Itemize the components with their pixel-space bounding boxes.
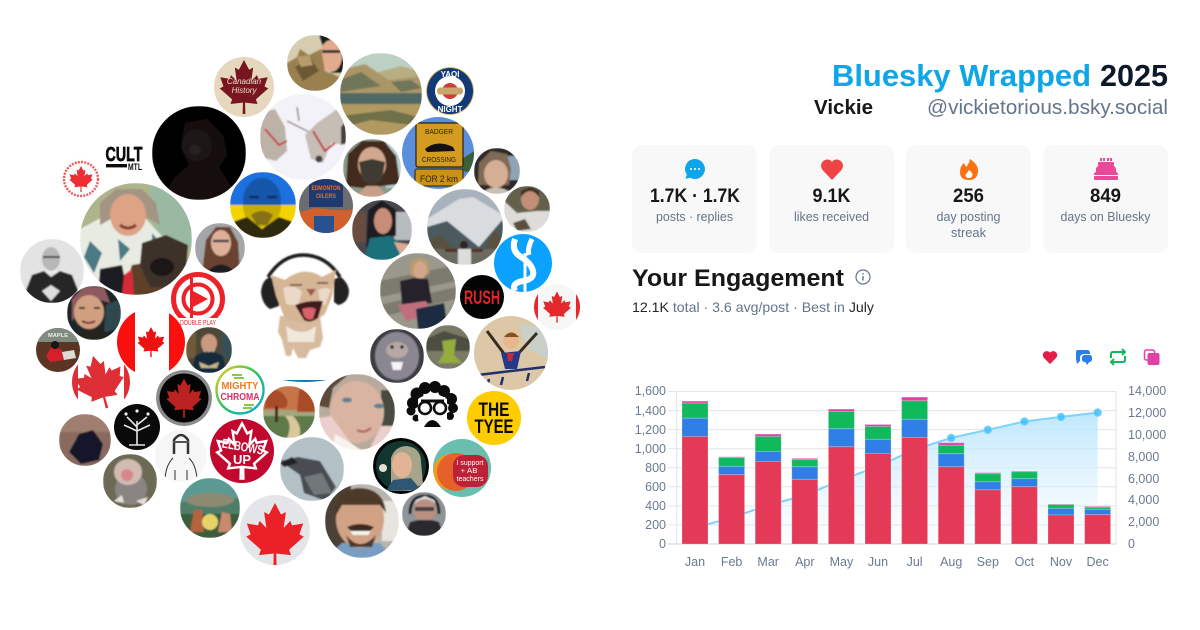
avatar: Maple podcast graphic	[36, 328, 80, 372]
bar: Nov	[1048, 504, 1074, 544]
avatar: Play logo red circle	[171, 272, 225, 327]
card: days on Bluesky: days on Bluesky	[1060, 209, 1151, 224]
avatar: cartoon boy drawing	[474, 316, 548, 390]
cat eyes	[290, 283, 328, 285]
month labels: Jun	[868, 555, 888, 569]
right axis labels: 4,000	[1128, 493, 1159, 507]
avatar: Elbows Up badge	[210, 419, 274, 483]
left axis labels: 200	[645, 518, 666, 532]
avatar: Badger Crossing road sign: CROSSING	[422, 155, 456, 164]
left axis labels: 1,000	[635, 442, 666, 456]
avatar: The Tyee logo: THE	[478, 400, 510, 421]
center: singing cat with headphones	[261, 255, 349, 358]
avatar: Canada flag	[117, 312, 185, 372]
icon: quote squares	[1144, 350, 1160, 365]
avatar: black dog on floor	[59, 414, 111, 466]
avatar: mountain view	[427, 189, 503, 265]
month labels: Oct	[1015, 555, 1035, 569]
bar: Aug	[938, 443, 964, 544]
card: streak	[906, 145, 1031, 253]
avatar: woman with pink hair	[67, 286, 121, 340]
engagement summary: 12.1K total · 3.6 avg/post · Best in July	[632, 299, 874, 315]
avatar: Maple podcast graphic: MAPLE	[48, 333, 68, 339]
month labels: Feb	[721, 555, 742, 569]
right axis labels: 8,000	[1128, 450, 1159, 464]
icon: replies bubbles	[1076, 350, 1092, 365]
card: streak: 256	[953, 186, 984, 207]
avatar: Badger Crossing road sign	[402, 117, 474, 189]
left axis labels: 0	[659, 537, 666, 551]
avatar: Cult MTL logo: MTL	[128, 162, 142, 172]
handle: @vickietorious.bsky.social	[927, 97, 1168, 119]
avatar: woman close-up selfie	[319, 374, 395, 450]
avatar: monkey grinning	[370, 329, 424, 383]
avatar: person with short hair	[474, 148, 520, 194]
left axis labels: 1,400	[635, 404, 666, 418]
title: Bluesky Wrapped: Bluesky Wrapped	[832, 58, 1091, 93]
cat mouth	[295, 301, 323, 322]
cat body	[278, 316, 323, 358]
avatar: Cult MTL logo: CULT	[106, 144, 142, 166]
avatar: woman with black face mask	[343, 139, 401, 197]
card: posts and replies	[632, 145, 757, 253]
avatar: woman sitting on stairs	[380, 253, 456, 329]
left axis labels: 600	[645, 480, 666, 494]
chart legend	[1043, 349, 1160, 365]
engagement heading: Your Engagement	[632, 265, 844, 292]
avatar: Edmonton Oilers crowd: EDMONTON	[312, 185, 341, 192]
icon: likes heart	[1043, 351, 1057, 364]
avatar: Edmonton Oilers crowd: OILERS	[316, 193, 337, 200]
avatar: The Tyee logo: TYEE	[474, 417, 514, 438]
avatar: bald man black and white	[20, 239, 84, 303]
card: posts and replies: posts · replies	[656, 209, 733, 224]
headphones band	[268, 255, 340, 277]
bar: May	[828, 409, 854, 544]
right axis labels: 10,000	[1128, 428, 1166, 442]
avatar: The Tyee logo	[467, 391, 521, 445]
avatar: Mighty Chroma logo: MIGHTY	[222, 381, 259, 392]
bar: Jan	[682, 401, 708, 544]
avatar: landscape painting	[340, 53, 422, 135]
avatar: woman with glasses and brown hair	[195, 223, 245, 273]
blue arc fragment	[282, 380, 327, 382]
avatar: smiling man with moustache	[325, 484, 399, 558]
month labels	[685, 555, 1109, 569]
avatar: woman with grey hair black ring	[373, 438, 429, 494]
card: days on Bluesky	[1043, 145, 1168, 253]
card: days on Bluesky: 849	[1090, 186, 1121, 207]
line points	[947, 409, 1101, 442]
month labels: May	[830, 555, 854, 569]
avatar: I support AB teachers apple: teachers	[456, 476, 484, 483]
right axis labels: 2,000	[1128, 515, 1159, 529]
month labels: Dec	[1086, 555, 1109, 569]
month labels: Nov	[1050, 555, 1073, 569]
avatar: raven painting	[280, 437, 344, 501]
avatar: Canadian History maple	[214, 57, 274, 117]
avatar: man in white shirt selfie	[504, 186, 550, 232]
bar: Dec	[1085, 506, 1111, 544]
avatar: maple leaf on black badge	[156, 370, 212, 426]
avatar: Canadian flag with fist	[534, 284, 580, 330]
left axis labels	[635, 384, 666, 551]
month labels: Mar	[757, 555, 779, 569]
avatar: big red maple leaf	[240, 495, 310, 567]
cumulative line	[695, 413, 1098, 528]
right axis labels	[1128, 384, 1166, 551]
chart: monthly engagement stacked bars with cumulative line	[635, 384, 1166, 569]
avatar: Rush logo	[460, 275, 504, 319]
icon: repost arrows	[1111, 349, 1125, 365]
right axis labels: 0	[1128, 537, 1135, 551]
avatar: Elbows Up badge: ELBOWS	[221, 436, 265, 458]
avatar: cat and woman with glasses	[287, 35, 345, 91]
avatar: reindeer in snow	[260, 94, 346, 180]
icon: cake	[1094, 158, 1118, 180]
cat chest	[286, 326, 316, 342]
avatar: distressed Canada flag	[72, 356, 130, 408]
bar: Mar	[755, 434, 781, 544]
avatar: moss on rock	[426, 325, 470, 369]
card: likes: likes received	[794, 209, 869, 224]
card: streak: streak	[951, 225, 986, 240]
card: posts and replies: 1.7K · 1.7K	[650, 186, 740, 207]
avatar: I support AB teachers apple: I support	[456, 460, 484, 467]
stacked bars	[682, 397, 1111, 544]
bar: Sep	[975, 473, 1001, 544]
avatar: Play logo red circle: DOUBLE PLAY	[180, 320, 216, 327]
avatar: autumn painting	[263, 386, 315, 438]
avatar: woman in teal shirt	[352, 200, 412, 260]
avatar: White Tree of Gondor	[114, 404, 160, 450]
header	[814, 58, 1168, 119]
left axis labels: 400	[645, 499, 666, 513]
avatar: Ukraine flag man	[230, 172, 296, 238]
cat tongue	[302, 308, 316, 320]
month labels: Apr	[795, 555, 815, 569]
avatar: groucho glasses face	[406, 381, 458, 429]
headphone right ear cup	[334, 277, 349, 305]
avatar: Badger Crossing road sign: BADGER	[425, 127, 454, 136]
left axis labels: 1,600	[635, 384, 666, 398]
avatar: Rush logo: RUSH	[464, 288, 500, 309]
icon: info	[856, 270, 870, 284]
avatar: line drawing woman	[155, 430, 207, 482]
display name: Vickie	[814, 97, 873, 119]
icon: chat bubble	[685, 159, 705, 179]
avatar cluster	[20, 35, 580, 567]
month labels: Jan	[685, 555, 705, 569]
avatar: Edmonton Oilers crowd	[299, 179, 353, 233]
avatar: Yaoi Night badge: YAOI	[441, 70, 459, 79]
avatar: Elbows Up badge: UP	[233, 452, 251, 467]
avatar: Product of Canada	[60, 158, 102, 200]
avatar: black pug	[152, 106, 246, 200]
avatar: Yaoi Night badge	[426, 67, 474, 115]
avatar: Badger Crossing road sign: FOR 2 km	[420, 174, 458, 185]
bar: Jun	[865, 424, 891, 544]
avatar: Mighty Chroma logo	[215, 365, 265, 415]
bar: Jul	[902, 397, 928, 544]
icon: flame	[960, 159, 978, 180]
avatar: blue snake staff logo	[494, 234, 552, 292]
title: year: 2025	[1100, 58, 1168, 93]
month labels: Aug	[940, 555, 962, 569]
bar: Apr	[792, 458, 818, 544]
avatar: Canadian History maple: Canadian	[227, 77, 262, 86]
avatar: I support AB teachers apple: + AB	[460, 468, 478, 475]
avatar: Yaoi Night badge: NIGHT	[438, 105, 463, 114]
avatar: Cult MTL logo	[106, 144, 142, 172]
right axis labels: 12,000	[1128, 406, 1166, 420]
card: likes	[769, 145, 894, 253]
avatar: older man with headphones	[402, 492, 446, 536]
stat cards	[632, 145, 1168, 253]
card: likes: 9.1K	[812, 186, 851, 207]
cat muzzle	[283, 287, 331, 306]
avatar: Canadian History maple: History	[232, 86, 257, 95]
cat head	[271, 270, 336, 323]
cat nose	[306, 289, 316, 296]
avatar: woman with boxer dog	[80, 183, 192, 295]
left axis labels: 1,200	[635, 423, 666, 437]
headphone left ear cup	[261, 277, 279, 309]
left axis labels: 800	[645, 461, 666, 475]
avatar: Mighty Chroma logo: CHROMA	[220, 392, 260, 403]
bar: Oct	[1011, 471, 1037, 544]
cumulative area	[695, 413, 1098, 544]
month labels: Sep	[977, 555, 999, 569]
right axis labels: 14,000	[1128, 384, 1166, 398]
right axis labels: 6,000	[1128, 472, 1159, 486]
chart grid	[668, 392, 1116, 544]
icon: heart	[821, 160, 843, 180]
card: streak: day posting	[936, 209, 1000, 224]
avatar: retro comic scene	[180, 478, 240, 538]
month labels: Jul	[907, 555, 923, 569]
avatar: I support AB teachers apple	[433, 439, 491, 497]
avatar: baby monkey	[103, 454, 157, 508]
bar: Feb	[719, 457, 745, 544]
avatar: bearded man reading	[186, 327, 232, 373]
